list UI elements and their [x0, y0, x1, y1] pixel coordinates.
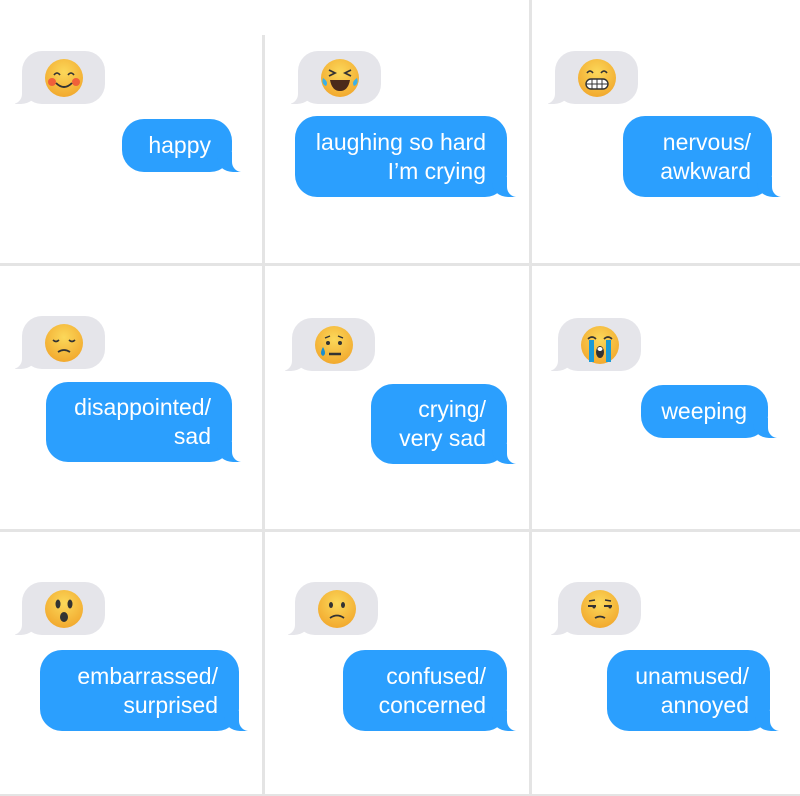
bubble: disappointed/sad: disappointed/ — [74, 394, 211, 420]
bubble: crying/very sad — [371, 384, 507, 464]
panel: nervous — [548, 51, 781, 197]
bubble: confused/concerned — [343, 650, 507, 731]
icon: disappointed face — [22, 316, 105, 369]
bubble: disappointed/sad: sad — [174, 423, 211, 449]
panel: crying — [285, 318, 516, 464]
bubble: laughing so hard I'm crying — [295, 116, 507, 197]
icon: unamused face — [558, 582, 641, 635]
bubble: nervous/awkward: nervous/ — [663, 128, 751, 154]
icon: grimacing — [555, 51, 638, 104]
icon: tears of joy — [298, 51, 381, 104]
bubble: crying/very sad: very sad — [399, 425, 486, 451]
bubble: unamused/annoyed: unamused/ — [635, 662, 749, 688]
icon: slightly frowning face — [295, 582, 378, 635]
bubble: disappointed/sad — [46, 382, 232, 462]
bubble: happy: happy — [148, 132, 211, 158]
bubble: crying/very sad: crying/ — [418, 396, 486, 422]
bubble: happy — [122, 119, 232, 172]
icon: loudly crying face — [558, 318, 641, 371]
bubble: nervous/awkward — [623, 116, 772, 197]
panel: embarrassed — [15, 582, 248, 731]
panel: disappointed — [15, 316, 241, 462]
bubble: embarrassed/surprised: embarrassed/ — [77, 662, 218, 688]
bubble: embarrassed/surprised — [40, 650, 239, 731]
bubble: weeping: weeping — [661, 398, 747, 424]
bubble: laughing so hard I'm crying: I’m crying — [388, 158, 486, 184]
bubble: weeping — [641, 385, 768, 438]
bubble: embarrassed/surprised: surprised — [123, 692, 218, 718]
panel: confused — [288, 582, 516, 731]
bubble: unamused/annoyed: annoyed — [661, 692, 749, 718]
bubble: confused/concerned: confused/ — [386, 662, 486, 688]
icon: smiling face — [22, 51, 105, 104]
icon: crying face — [292, 318, 375, 371]
bubble: unamused/annoyed — [607, 650, 770, 731]
panel: laughing — [291, 51, 516, 197]
bubble: laughing so hard I'm crying: laughing so hard — [316, 128, 486, 154]
panel: weeping — [551, 318, 777, 438]
panel: happy — [15, 51, 241, 172]
bubble: nervous/awkward: awkward — [660, 158, 751, 184]
icon: astonished face — [22, 582, 105, 635]
panel: unamused — [551, 582, 779, 731]
bubble: confused/concerned: concerned — [379, 692, 486, 718]
